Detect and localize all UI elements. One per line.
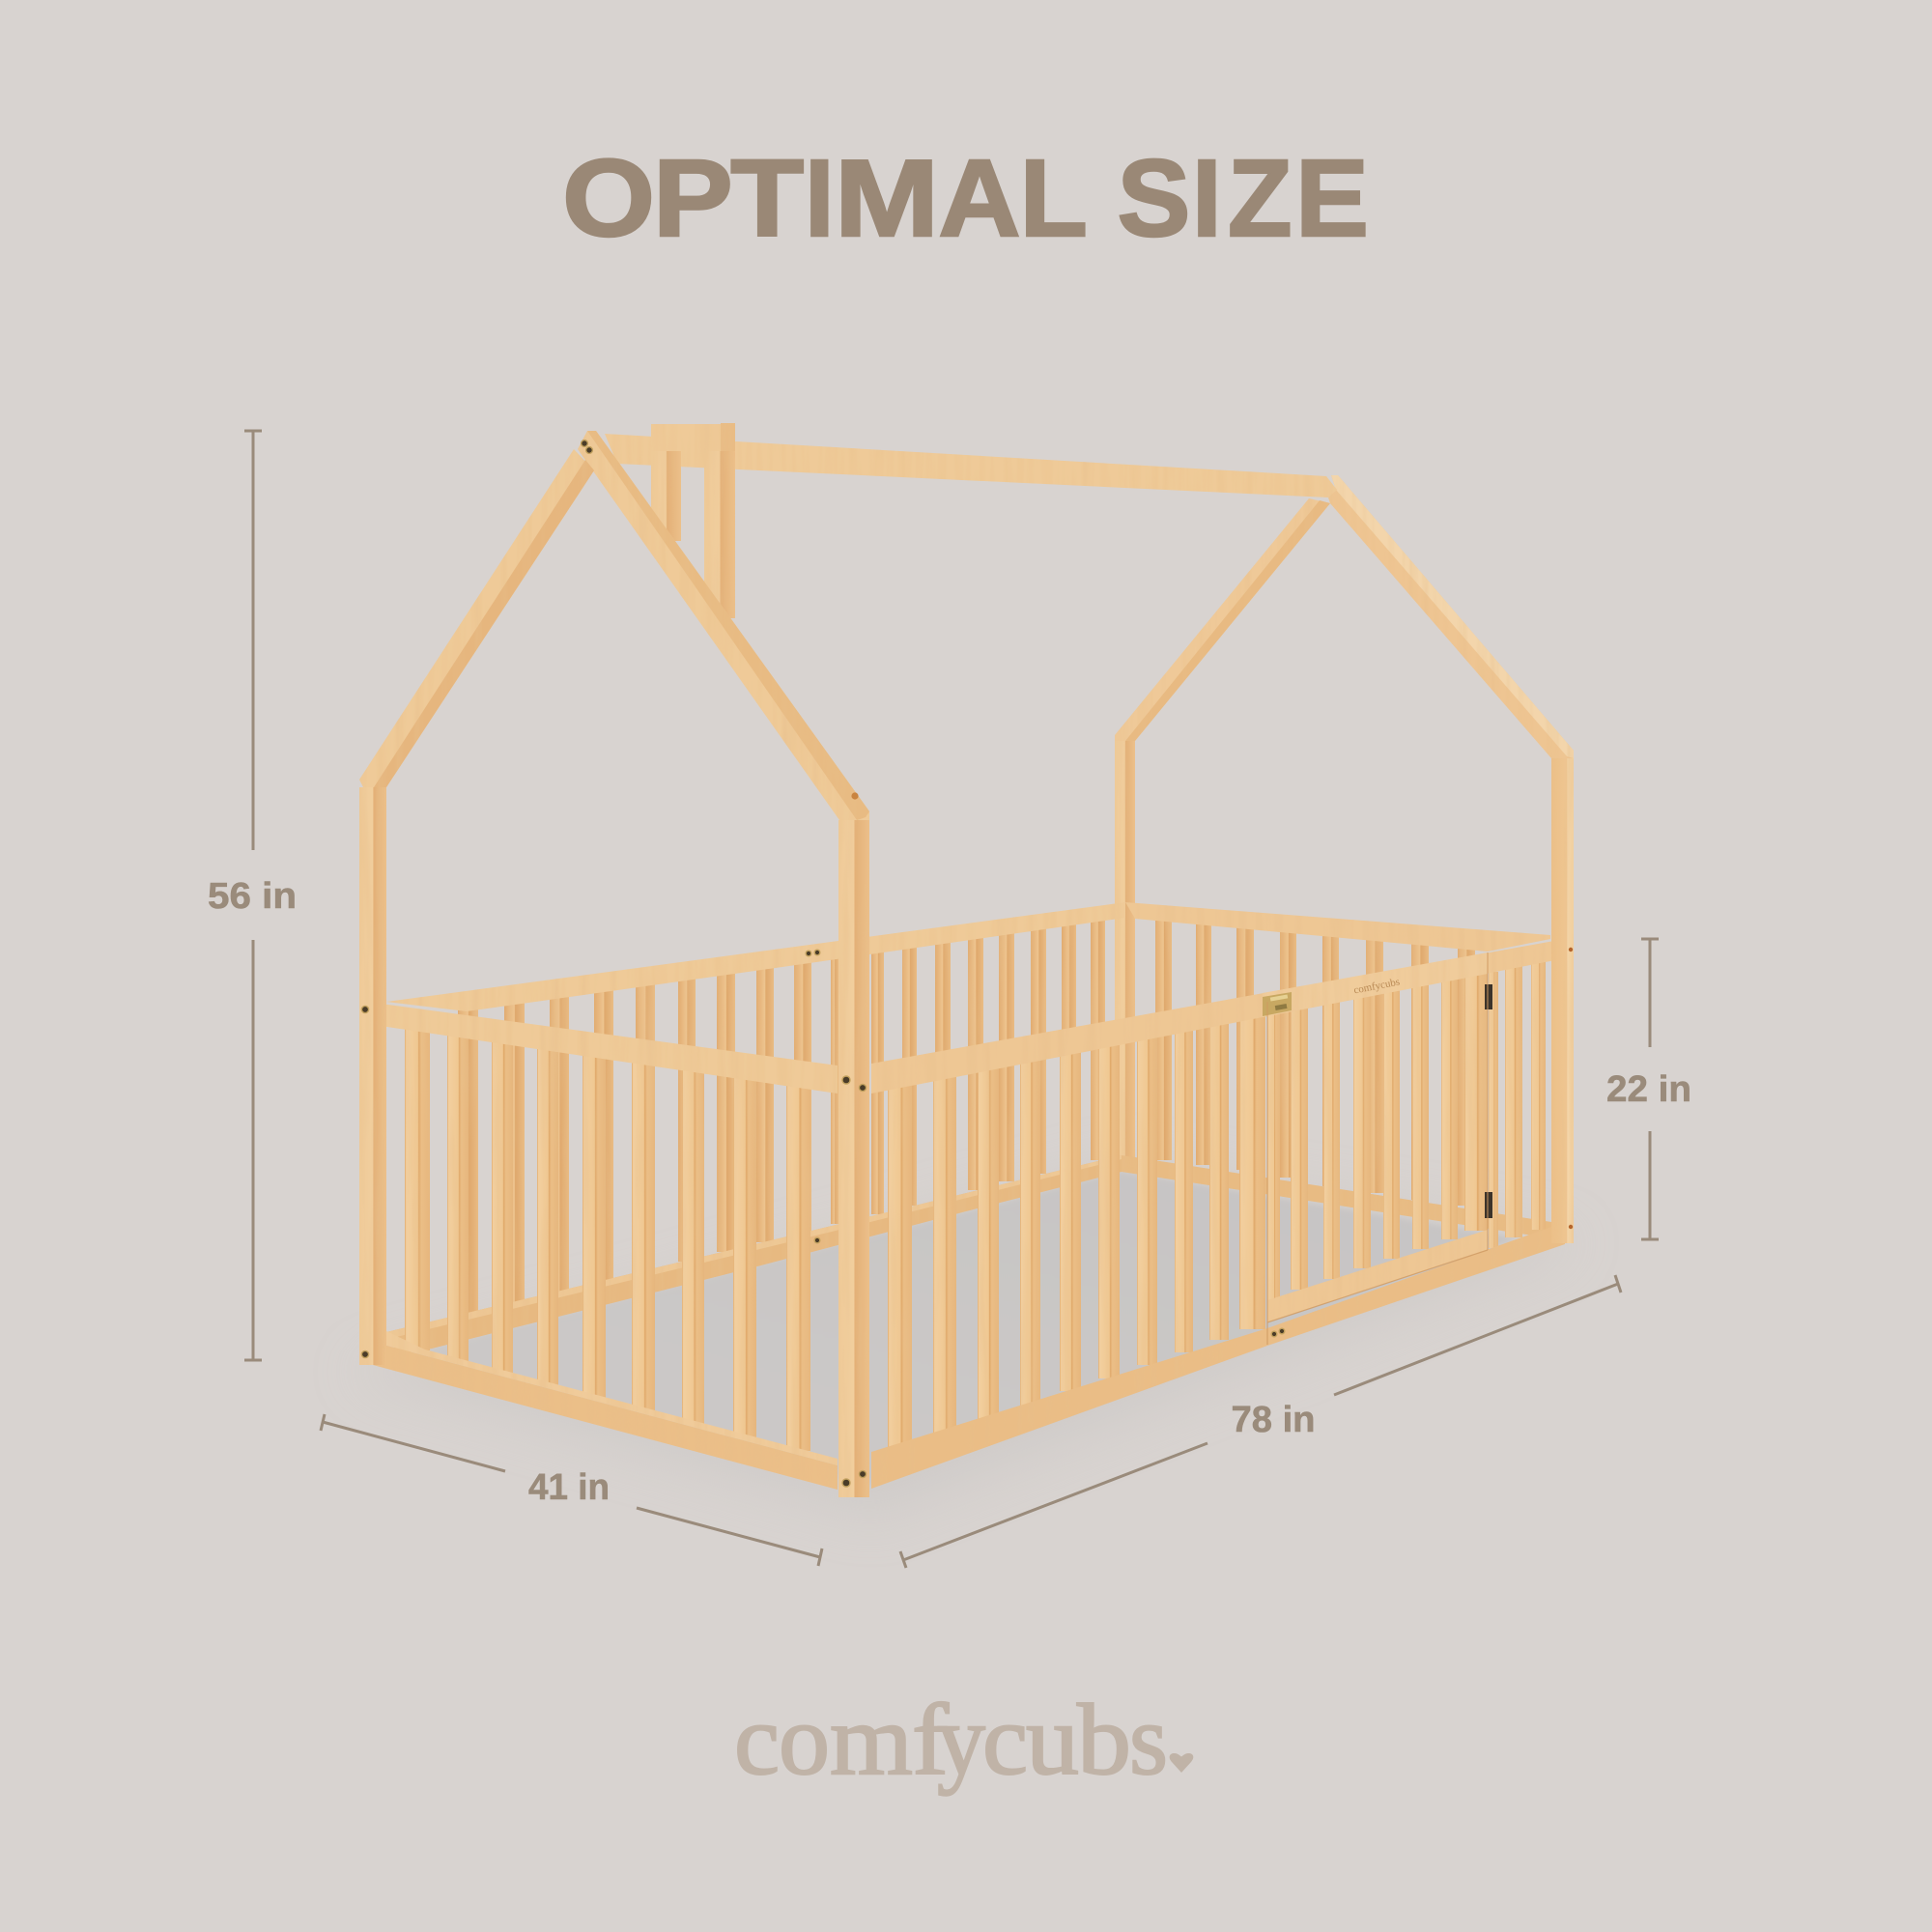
title: L: [1020, 137, 1088, 259]
brand logo: f: [912, 1683, 949, 1796]
near long-side bottom rail: [871, 1222, 1565, 1489]
foot-end slats: [405, 1017, 810, 1451]
near long-side slats: [888, 954, 1546, 1450]
dimension: width 41 in: [321, 1414, 822, 1566]
floor shadow: [348, 1164, 1584, 1517]
dimension: height 56 in: 56 in: [208, 876, 297, 917]
latch: [1263, 992, 1292, 1016]
dimension: length 78 in: [900, 1275, 1621, 1568]
brand logo: y: [937, 1683, 985, 1796]
title: E: [1295, 137, 1369, 259]
upper hinge: [1485, 984, 1492, 1009]
title: I: [805, 137, 835, 259]
brand logo: s: [1129, 1683, 1168, 1796]
dimension: length 78 in: 78 in: [1231, 1400, 1316, 1440]
chimney: [651, 423, 735, 618]
title: S: [1118, 137, 1190, 259]
left corner post: [359, 787, 386, 1365]
title: Z: [1228, 137, 1292, 259]
title: A: [939, 137, 1020, 259]
screws: [361, 440, 1573, 1487]
dimension: rail height 22 in: 22 in: [1606, 1069, 1691, 1110]
brand logo: c: [982, 1683, 1028, 1796]
right corner post: [1551, 758, 1574, 1243]
gate details: [1263, 952, 1492, 1345]
title: O: [562, 137, 655, 259]
title: M: [835, 137, 939, 259]
gate seams: [1267, 952, 1488, 1345]
bed frame: [359, 423, 1574, 1497]
brand logo: o: [779, 1683, 830, 1796]
title: I: [1192, 137, 1222, 259]
lower hinge: [1485, 1192, 1492, 1218]
head-end slats: [1155, 915, 1475, 1206]
brand logo: b: [1077, 1683, 1131, 1796]
brand logo: m: [830, 1683, 913, 1796]
left roof rafter: [359, 449, 594, 787]
brand logo: u: [1026, 1683, 1079, 1796]
far-side front roof rafter: [578, 431, 869, 820]
far long-side slats: [458, 917, 1105, 1314]
logo heart: [1170, 1753, 1193, 1773]
ridge beam: [605, 434, 1337, 497]
brand logo: c: [734, 1683, 780, 1796]
rails on far side and head end: [386, 902, 1551, 1354]
title: P: [653, 137, 733, 259]
back-left corner post and back gable: [1115, 475, 1574, 1172]
near long-side top rail: [871, 939, 1565, 1094]
dimension: width 41 in: 41 in: [528, 1467, 610, 1508]
brand logo: [734, 1683, 1193, 1796]
foot-end rails: [373, 1003, 838, 1490]
front corner post: [838, 820, 869, 1497]
title: T: [730, 137, 804, 259]
engraved logo on gate: comfycubs: [1352, 976, 1401, 996]
